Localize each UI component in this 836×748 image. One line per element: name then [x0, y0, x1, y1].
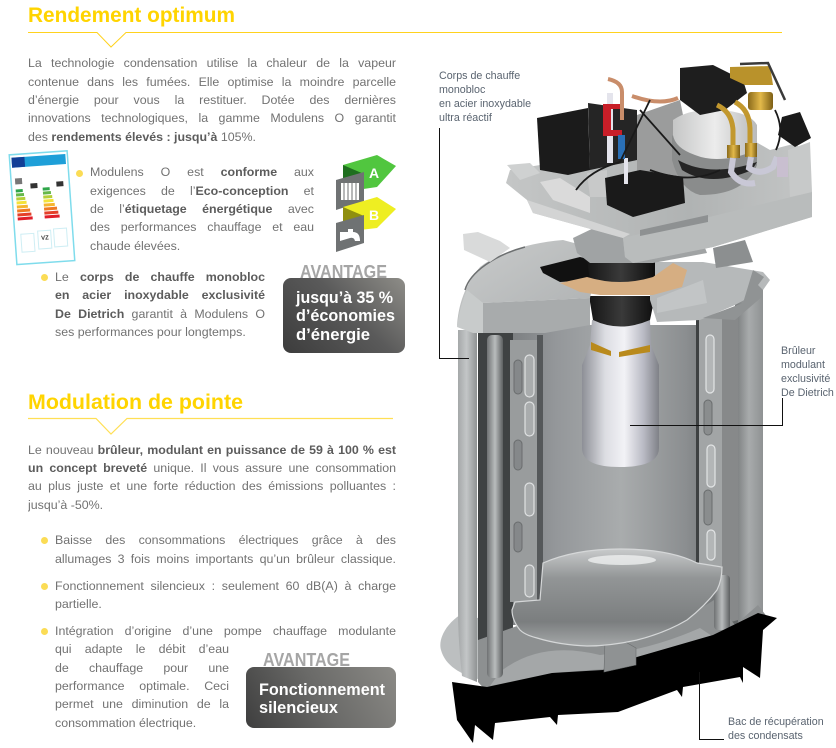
floor under combustion chamber	[478, 600, 768, 692]
lid curved edge	[457, 290, 483, 333]
raised right bracket	[788, 142, 812, 197]
neck adapter under plate	[573, 225, 707, 263]
bullet: conforme: de l’étiquetage énergétique avec	[90, 202, 314, 216]
black gas valve	[680, 65, 747, 115]
white rods	[607, 93, 628, 184]
main cylinder interior	[478, 325, 738, 625]
fan lower ring	[672, 135, 757, 195]
heading: Modulation de pointe: Modulation de pointe	[28, 391, 243, 414]
bullet: conforme: Modulens O est conforme aux	[90, 165, 314, 179]
red clip	[603, 104, 622, 136]
callout: corps de chauffe: en acier inoxydable	[439, 98, 531, 110]
modulation paragraph: jusqu’à -50%.	[28, 498, 103, 512]
modulation paragraph: au plus juste et une forte réduction des émissions polluantes :	[28, 479, 396, 493]
gold fittings	[717, 92, 773, 158]
tan insulation disk	[560, 263, 687, 295]
gold valve block	[730, 66, 773, 85]
burner gold bands	[591, 342, 650, 357]
intro paragraph: La technologie condensation utilise la chaleur de la vapeur	[28, 56, 396, 70]
advantage box: economies	[283, 278, 405, 353]
right outer wall	[735, 285, 763, 632]
bullet: silencieux	[41, 579, 396, 611]
advantage label 2: AVANTAGE	[263, 650, 350, 670]
left outer wall	[458, 330, 477, 682]
advantage box: economies: d’énergie	[296, 325, 370, 344]
energy class arrows: A	[369, 165, 379, 181]
bullet: silencieux: Fonctionnement silencieux : seulement 60 dB(A) à charge	[55, 579, 396, 593]
white block on plate	[540, 178, 590, 213]
bullet: conforme: exigences de l’Eco-conception et	[90, 184, 314, 198]
drain spout	[604, 640, 636, 672]
bullet: pompe: consommation électrique.	[55, 716, 196, 730]
dome highlight	[588, 555, 656, 565]
energy label	[9, 151, 75, 265]
advantage box: economies: d’économies	[296, 306, 395, 325]
lid front face	[483, 298, 590, 333]
black burner neck	[589, 296, 655, 326]
intro paragraph: des rendements élevés : jusqu’à 105%.	[28, 130, 256, 144]
upper burner neck	[587, 258, 655, 287]
bullet: consommations	[41, 533, 396, 566]
intro paragraph: contenue dans les fumées. Elle optimise la moindre parcelle	[28, 75, 396, 89]
blue sleeve	[618, 135, 625, 159]
bullet: conforme: chaude élevées.	[90, 239, 180, 253]
black cables	[576, 100, 780, 190]
advantage box: silencieux: Fonctionnement	[259, 680, 385, 699]
modulation paragraph: un concept breveté unique. Il vous assure une consommation	[28, 461, 396, 475]
black gasket plate	[540, 257, 600, 282]
callout: corps de chauffe: Corps de chauffe	[439, 70, 520, 82]
second heading rule with chevron	[28, 418, 393, 434]
callout: bruleur: De Dietrich	[781, 387, 834, 399]
left flange of the base	[440, 615, 490, 680]
black control module	[537, 103, 637, 175]
bullet: corps de chauffe	[41, 270, 265, 339]
bottom dome of the combustion chamber	[512, 549, 722, 646]
silver U pipes	[731, 157, 777, 184]
black electric box	[605, 170, 685, 217]
leader line: bruleur	[630, 398, 782, 426]
callout: bac: des condensats	[728, 730, 803, 742]
modulation paragraph	[28, 443, 396, 512]
callout: corps de chauffe	[439, 70, 531, 124]
mid background of the components	[637, 100, 690, 190]
heading: Rendement optimum: Rendement optimum	[28, 4, 235, 27]
bullet: conforme	[76, 165, 314, 253]
bullet: pompe	[41, 624, 396, 730]
left corrugated heat exchanger	[510, 335, 543, 602]
intro paragraph: d’énergie pour vous la restituer. Dotée des dernières	[28, 93, 396, 107]
right block under plate	[713, 240, 753, 268]
top mounting plate	[506, 110, 812, 263]
leader line: corps de chauffe	[440, 128, 469, 358]
burner tube	[582, 320, 659, 467]
bullet: silencieux: partielle.	[55, 597, 102, 611]
advantage label 1: AVANTAGE	[300, 262, 387, 282]
bullet: pompe: de chauffage pour une	[55, 661, 229, 675]
bullet: consommations: Baisse des consommations électriques grâce à des	[55, 533, 396, 547]
callout: bruleur: Brûleur	[781, 345, 815, 357]
copper pipe	[608, 79, 678, 120]
black condensate tray	[452, 613, 777, 743]
right vertical pipe	[714, 575, 730, 630]
fan housing	[673, 110, 757, 159]
intro paragraph	[28, 56, 396, 144]
bullet: pompe: performance optimale. Ceci	[55, 679, 229, 693]
leader line: bac	[700, 672, 724, 740]
right corrugated heat exchanger	[696, 318, 722, 566]
callout: bruleur	[781, 345, 834, 399]
heading rule with chevron	[28, 32, 782, 47]
callout: bac: Bac de récupération	[728, 716, 824, 728]
advantage box: silencieux: silencieux	[259, 698, 339, 717]
bullet: consommations: allumages 3 fois moins importants qu’un brûleur classique.	[55, 552, 396, 566]
bullet: corps de chauffe: Le corps de chauffe monobloc	[55, 270, 265, 284]
callout: bruleur: modulant	[781, 359, 825, 371]
grey lid top	[457, 240, 600, 327]
right lid section	[650, 262, 770, 322]
bullet: corps de chauffe: ses performances pour longtemps.	[55, 325, 246, 339]
left vertical pipe	[487, 335, 503, 678]
bullet: conforme: des performances chauffage et eau	[90, 220, 314, 234]
energy label: VZ	[41, 235, 49, 242]
black right connector	[778, 112, 811, 147]
white tabs on lid	[463, 232, 510, 262]
advantage box: economies: jusqu’à 35 %	[295, 288, 393, 307]
advantage box: silencieux	[246, 667, 396, 728]
bullet: pompe: Intégration d’origine d’une pompe chauffage modulante	[55, 624, 396, 638]
callout: corps de chauffe: ultra réactif	[439, 112, 492, 124]
lilac part	[777, 157, 788, 177]
energy class arrows	[336, 155, 396, 252]
white connector	[507, 163, 540, 180]
energy class arrows: B	[369, 207, 379, 223]
callout: bruleur: exclusivité	[781, 373, 830, 385]
chrome pipe	[740, 63, 785, 100]
callout: bac	[728, 716, 824, 742]
bullet: corps de chauffe: De Dietrich garantit à Modulens O	[55, 307, 265, 321]
modulation paragraph: Le nouveau brûleur, modulant en puissance de 59 à 100 % est	[28, 443, 396, 457]
callout: corps de chauffe: monobloc	[439, 84, 485, 96]
bullet: corps de chauffe: en acier inoxydable exclusivité	[55, 288, 265, 302]
bullet: pompe: permet une diminution de la	[55, 697, 229, 711]
bullet: pompe: qui adapte le débit d’eau	[55, 642, 229, 656]
intro paragraph: innovations technologiques, la gamme Modulens O garantit	[28, 111, 396, 125]
